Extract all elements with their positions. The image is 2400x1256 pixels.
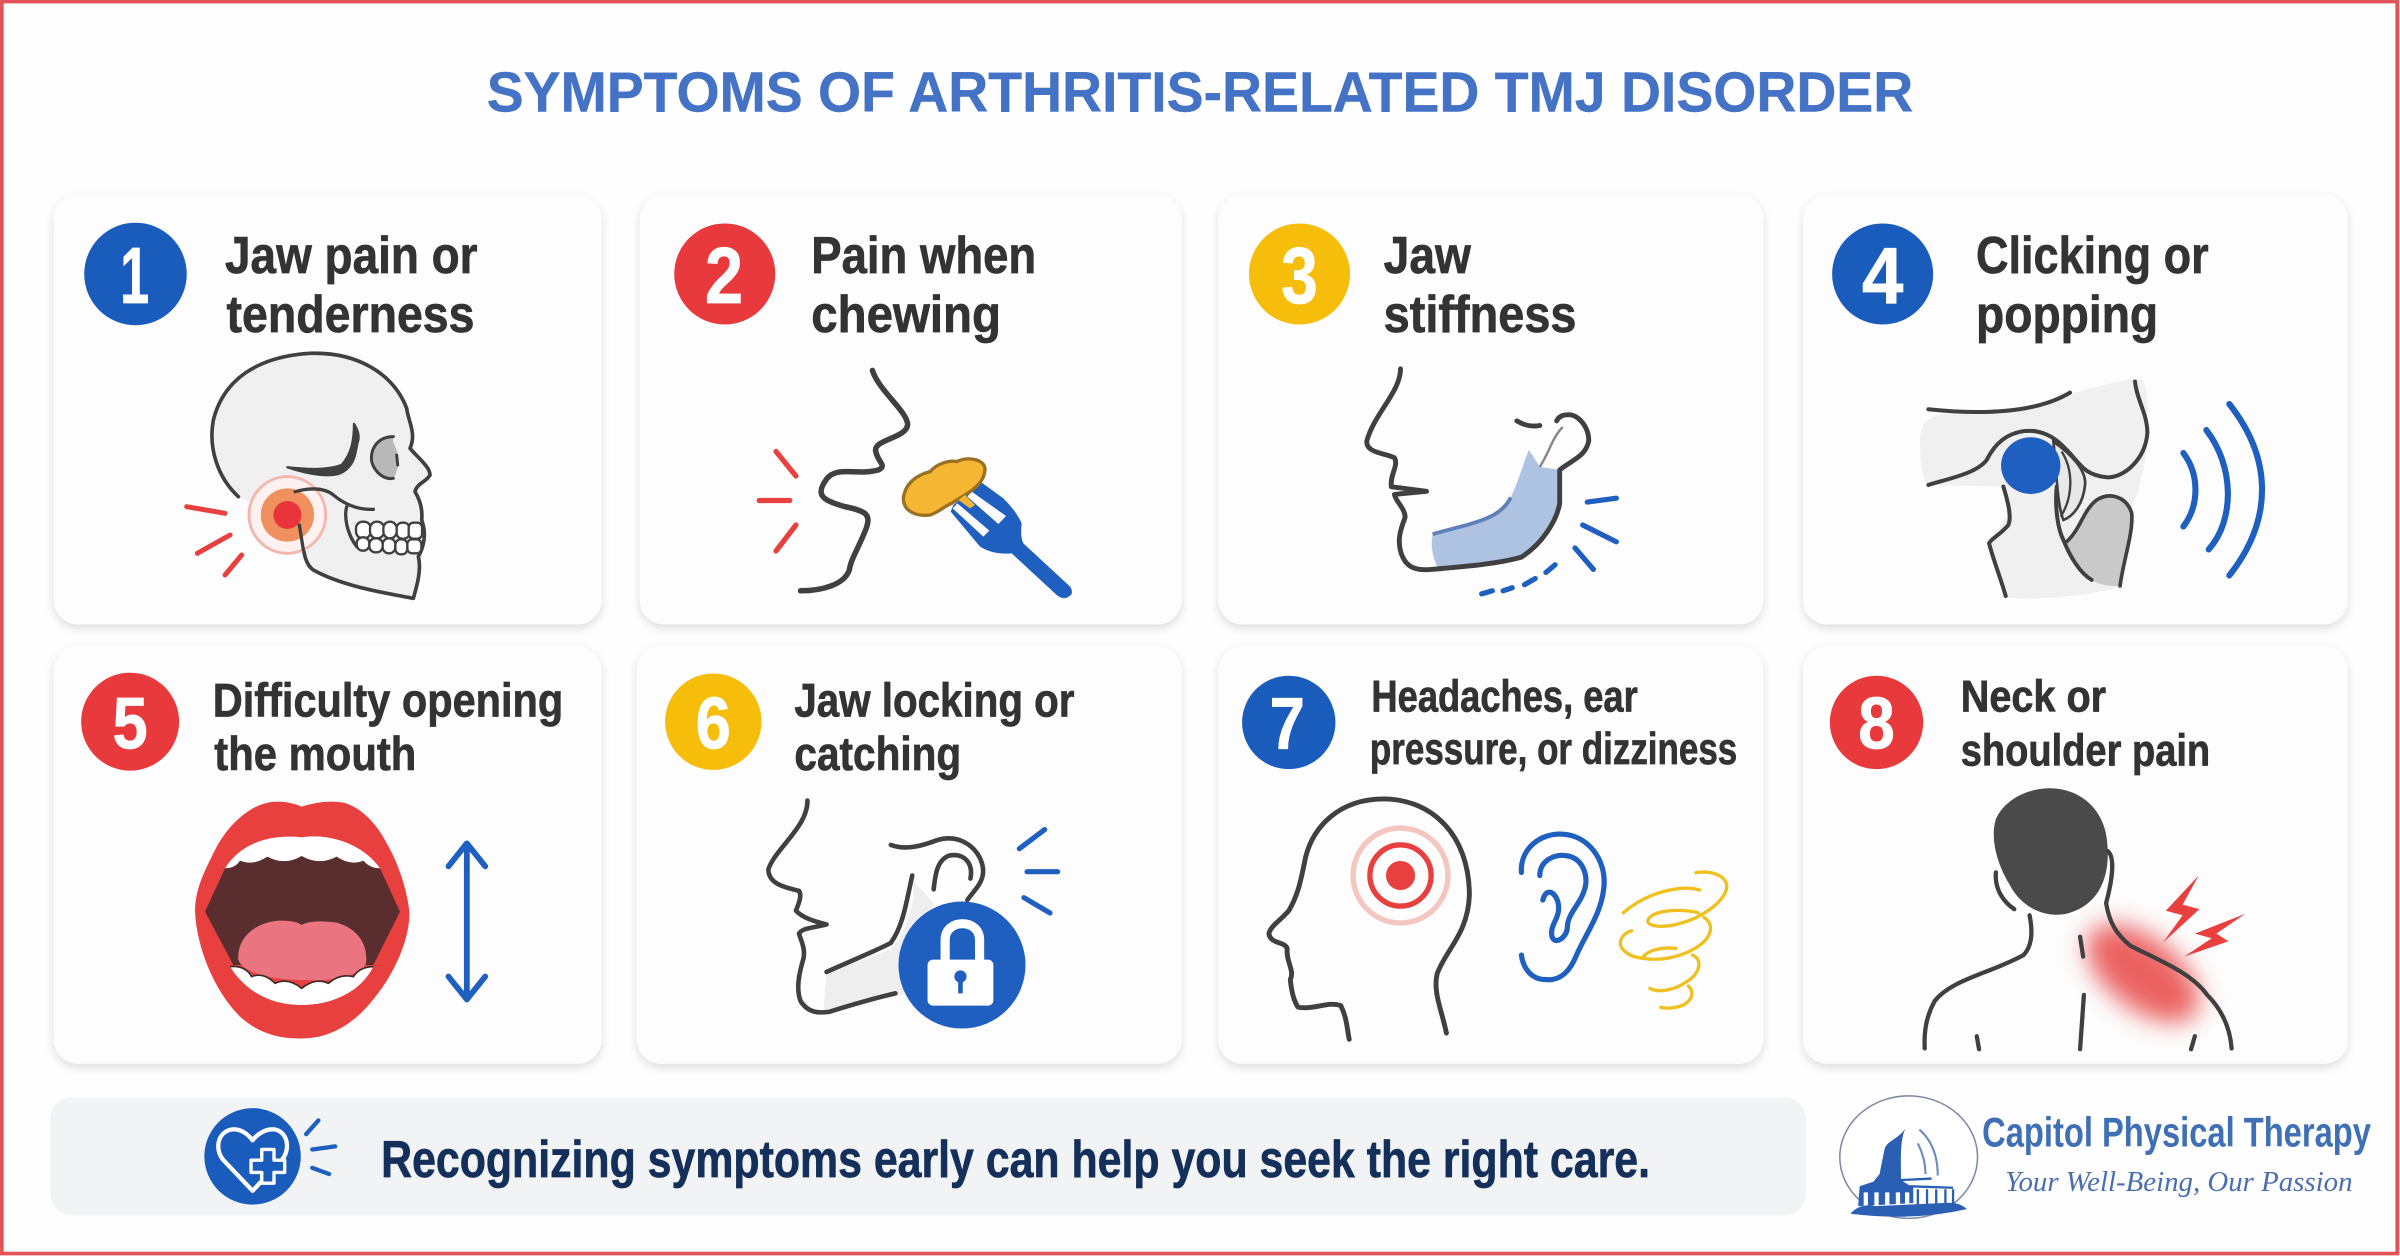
- heading 2: Pain when: [811, 227, 1036, 285]
- badge 6: 6: [696, 681, 731, 764]
- badge 5: 5: [113, 681, 148, 764]
- logo emblem: [1840, 1096, 1978, 1218]
- icon: neck and shoulder pain: [1925, 788, 2245, 1049]
- heading 3: Jaw: [1384, 227, 1471, 285]
- callout bar: [51, 1097, 1806, 1215]
- icon: open mouth: [195, 802, 485, 1038]
- heading 3: [1384, 227, 1577, 344]
- panel: jaw stiffness: [1218, 194, 1763, 624]
- badge 2: 2: [705, 231, 743, 320]
- icon: locked jaw: [768, 800, 1058, 1029]
- badge 4: [1832, 223, 1933, 324]
- heading 4: Clicking or: [1976, 227, 2209, 285]
- badge 1: 1: [120, 231, 149, 320]
- heading 7: [1370, 673, 1737, 774]
- logo tagline: Your Well-Being, Our Passion: [2005, 1167, 2353, 1198]
- dizziness spiral: [1620, 872, 1727, 1008]
- heading 2: chewing: [811, 286, 1001, 344]
- heading 8: [1961, 673, 2210, 775]
- badge 6: [665, 673, 761, 770]
- panel: jaw pain or tenderness: [54, 194, 602, 624]
- icon: profile chewing with fork: [759, 370, 1072, 598]
- takeaway text: Recognizing symptoms early can help you seek the right care.: [381, 1131, 1650, 1189]
- logo: Capitol Physical Therapy: [1840, 1096, 2371, 1218]
- heading 7: pressure, or dizziness: [1370, 725, 1737, 774]
- badge 4: 4: [1862, 231, 1903, 320]
- icon: head, ear and dizziness: [1269, 799, 1727, 1039]
- heading 1: tenderness: [227, 286, 475, 344]
- heading 6: [794, 674, 1074, 781]
- teeth: [356, 522, 422, 554]
- heading 7: Headaches, ear: [1371, 673, 1638, 722]
- heading 8: Neck or: [1961, 673, 2106, 722]
- icon: heart with medical cross: [204, 1108, 335, 1205]
- title: SYMPTOMS OF ARTHRITIS-RELATED TMJ DISORDER: [487, 62, 1913, 125]
- heading 5: Difficulty opening: [213, 674, 563, 727]
- heading 3: stiffness: [1384, 286, 1577, 344]
- heading 5: the mouth: [214, 728, 416, 781]
- heading 1: [225, 227, 478, 344]
- badge 7: [1242, 676, 1335, 769]
- panel: difficulty opening the mouth: [54, 646, 602, 1064]
- badge 1: [84, 223, 187, 325]
- badge 3: 3: [1281, 231, 1318, 320]
- badge 5: [81, 673, 179, 771]
- panel: clicking or popping: [1803, 194, 2348, 624]
- double arrow: [448, 843, 485, 999]
- heading 6: catching: [794, 728, 961, 781]
- icon: skull with jaw pain: [187, 353, 430, 598]
- fork and food: [903, 459, 1072, 598]
- heading 6: Jaw locking or: [794, 674, 1074, 727]
- icon: jaw joint with sound waves: [1920, 378, 2262, 598]
- heading 5: [213, 674, 563, 781]
- badge 8: [1830, 676, 1923, 769]
- icon: stiff jaw: [1367, 369, 1616, 594]
- panel: neck or shoulder pain: [1803, 646, 2348, 1064]
- heading 4: [1976, 227, 2209, 344]
- badge 8: 8: [1858, 681, 1895, 764]
- panel: pain when chewing: [640, 194, 1182, 624]
- heading 1: Jaw pain or: [225, 227, 478, 285]
- badge 2: [674, 223, 775, 324]
- heading 4: popping: [1976, 286, 2158, 344]
- heading 2: [811, 227, 1036, 344]
- heading 8: shoulder pain: [1961, 726, 2210, 775]
- badge 7: 7: [1270, 681, 1305, 764]
- panel: headaches, ear pressure, dizziness: [1218, 646, 1763, 1064]
- badge 3: [1249, 223, 1350, 324]
- panel: jaw locking or catching: [637, 646, 1182, 1064]
